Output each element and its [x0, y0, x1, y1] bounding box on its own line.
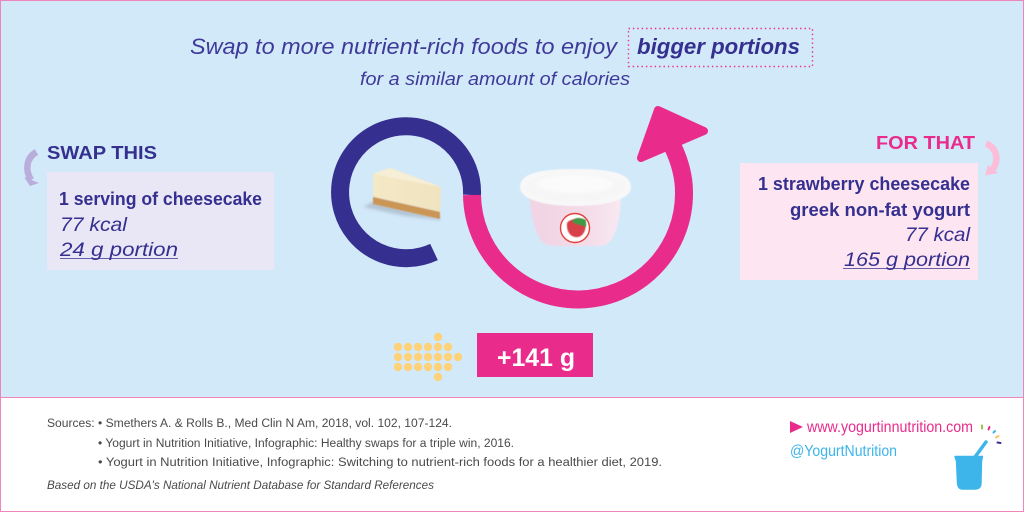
- sources text: [47, 418, 662, 469]
- heading: for that: FOR THAT: [876, 132, 976, 153]
- image: cheesecake: [363, 168, 441, 220]
- icon: dotted arrow: [394, 333, 462, 381]
- callout: +141 g: +141 g: [497, 344, 575, 372]
- sources text: Sources: • Smethers A. & Rolls B., Med Clin N Am, 2018, vol. 102, 107-124.: [47, 418, 452, 430]
- arrow: navy arc: [340, 126, 472, 258]
- footer panel: [0, 398, 1024, 512]
- icon: yogurt cup logo: [955, 426, 1000, 489]
- sources text: • Yogurt in Nutrition Initiative, Infographic: Healthy swaps for a triple win, 2016.: [98, 438, 514, 450]
- title: [190, 28, 812, 66]
- website link: www.yogurtinnutrition.com: [806, 419, 973, 436]
- database note: Based on the USDA's National Nutrient Database for Standard References: [47, 480, 434, 492]
- subtitle: for a similar amount of calories: [360, 69, 630, 89]
- highlighted phrase: bigger portions: [628, 28, 812, 66]
- text box: yogurt: greek non-fat yogurt: [790, 200, 970, 220]
- text box: cheesecake: 77 kcal: [60, 215, 128, 236]
- text box: yogurt: 1 strawberry cheesecake: [758, 174, 970, 194]
- sources text: • Yogurt in Nutrition Initiative, Infographic: Switching to nutrient-rich foods for a healthier diet, 2019.: [98, 457, 662, 469]
- text box: yogurt: 77 kcal: [905, 225, 971, 246]
- icon: curved arrow right: [985, 144, 998, 176]
- panel: for that: [740, 132, 998, 280]
- text box: yogurt: 165 g portion: [844, 250, 970, 271]
- title: Swap to more nutrient-rich foods to enjoy: [190, 34, 619, 59]
- strawberry badge: [560, 214, 590, 242]
- social handle: @YogurtNutrition: [790, 443, 897, 460]
- text box: cheesecake: 1 serving of cheesecake: [59, 189, 262, 209]
- text box: yogurt: [740, 163, 978, 280]
- text box: cheesecake: [47, 172, 274, 270]
- heading: swap this: SWAP THIS: [47, 142, 157, 163]
- image: strawberry yogurt cup: [520, 169, 631, 246]
- background panel: [0, 0, 1024, 398]
- highlighted phrase: bigger portions: bigger portions: [637, 34, 800, 59]
- icon: curved arrow left: [24, 152, 39, 186]
- arrow: pink arc with head: [472, 110, 704, 299]
- panel: swap this: [24, 142, 274, 270]
- text box: cheesecake: 24 g portion: [59, 240, 178, 261]
- callout: +141 g: [477, 333, 593, 377]
